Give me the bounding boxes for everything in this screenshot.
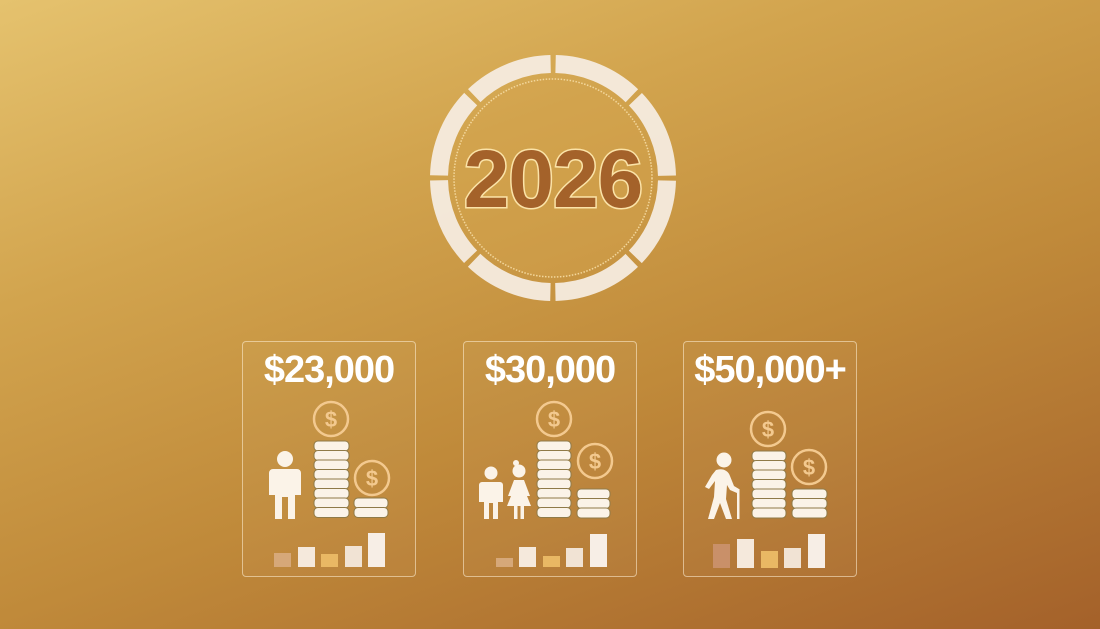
amount: $30,000 [485,349,615,391]
icons: person and coins: $ [325,407,337,432]
icons: elderly and coins: $ [803,455,815,480]
card: senior $50,000+ [683,341,857,577]
icons: person and coins: $ [366,466,378,491]
year text: 2026 [464,134,642,225]
amount: $50,000+ [694,349,846,391]
card: single $23,000 [242,341,416,577]
icons: elderly and coins: $ [762,417,774,442]
bar chart [496,534,607,567]
icons: kids and coins: $ [548,407,560,432]
icons: kids and coins [479,400,614,567]
icons: kids and coins: $ [589,449,601,474]
icons: elderly and coins [705,410,828,568]
icons: person and coins [269,400,390,567]
amount: $23,000 [264,349,394,391]
bar chart [274,533,385,567]
card: family $30,000 [463,341,637,577]
bar chart [713,534,825,568]
